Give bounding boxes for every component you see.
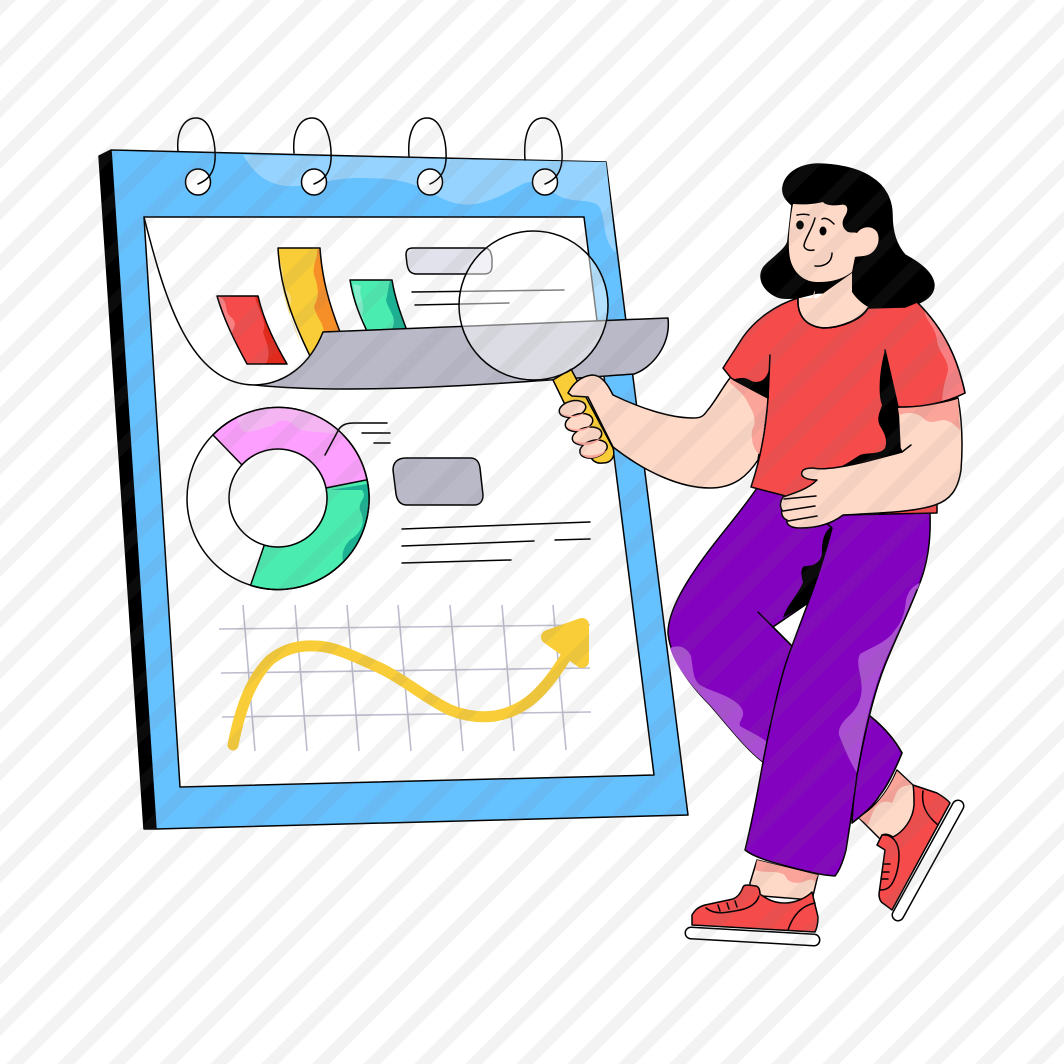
back sole	[898, 806, 958, 915]
front sole	[691, 933, 814, 940]
ankle skin	[750, 860, 818, 900]
text lines middle	[402, 522, 590, 563]
pocket crease	[758, 612, 792, 646]
ankle skin	[858, 770, 920, 845]
donut ring	[187, 408, 369, 590]
arm crease	[902, 445, 911, 452]
board side shadow	[99, 150, 156, 829]
inner hole	[229, 449, 327, 547]
red bar	[217, 296, 287, 364]
front leg	[745, 500, 930, 876]
arm shadow	[898, 399, 960, 430]
front leg inner edge	[857, 590, 917, 775]
shirt	[723, 298, 965, 515]
donut callout	[325, 423, 390, 455]
neck	[797, 273, 880, 330]
hair	[761, 164, 934, 309]
bar chart	[217, 248, 406, 364]
back leg	[668, 488, 902, 823]
magnifier lens	[459, 231, 608, 380]
sleeve shadow on arm	[730, 378, 768, 455]
right arm	[780, 398, 962, 528]
line chart	[219, 605, 591, 751]
sleeve fold line	[768, 355, 770, 398]
nose	[804, 218, 815, 250]
chart grid	[219, 605, 591, 751]
pink segment	[213, 407, 367, 488]
yellow bar	[278, 248, 340, 356]
donut outline	[213, 407, 369, 590]
leg gap	[773, 603, 808, 646]
sleeve inner shadow	[734, 372, 769, 398]
torso shadow	[840, 350, 902, 467]
green bar	[350, 280, 406, 330]
back leg highlight	[670, 646, 767, 762]
trend arrow	[233, 625, 582, 745]
person	[459, 164, 970, 940]
gray label box	[393, 458, 483, 505]
front shoe	[692, 885, 818, 932]
pants shadow	[783, 526, 832, 618]
shoulder outline	[898, 302, 965, 407]
paper curl	[144, 217, 668, 389]
eyes	[796, 220, 804, 230]
fingers	[557, 398, 609, 461]
ear	[855, 227, 879, 257]
pink segment highlight	[238, 408, 342, 436]
green segment	[251, 480, 369, 590]
back foot	[858, 770, 958, 915]
shoe details	[706, 896, 759, 913]
hand finger lines	[783, 496, 817, 521]
face	[789, 202, 879, 282]
smile	[815, 253, 832, 266]
sleeve highlight	[924, 311, 964, 401]
curl underside	[255, 318, 668, 389]
board blue panel	[111, 150, 688, 829]
ankle shadow	[755, 860, 818, 883]
collar	[798, 298, 868, 328]
green segment shadow	[330, 484, 368, 562]
front foot	[691, 860, 818, 940]
back shoe	[877, 785, 950, 910]
brows	[797, 213, 809, 216]
shoe tongue	[880, 835, 899, 890]
magnifier handle	[553, 369, 614, 463]
board highlight	[243, 155, 616, 253]
left arm	[557, 375, 768, 488]
text lines top	[412, 290, 564, 305]
paper sheet	[144, 217, 654, 787]
binder rings	[178, 118, 562, 195]
back leg hem	[855, 718, 900, 821]
title placeholder pill	[406, 248, 492, 274]
curl edge	[144, 217, 255, 385]
clipboard board	[99, 118, 688, 829]
front leg highlight	[839, 583, 920, 773]
ankle shadow	[859, 771, 912, 825]
donut chart	[187, 405, 390, 590]
